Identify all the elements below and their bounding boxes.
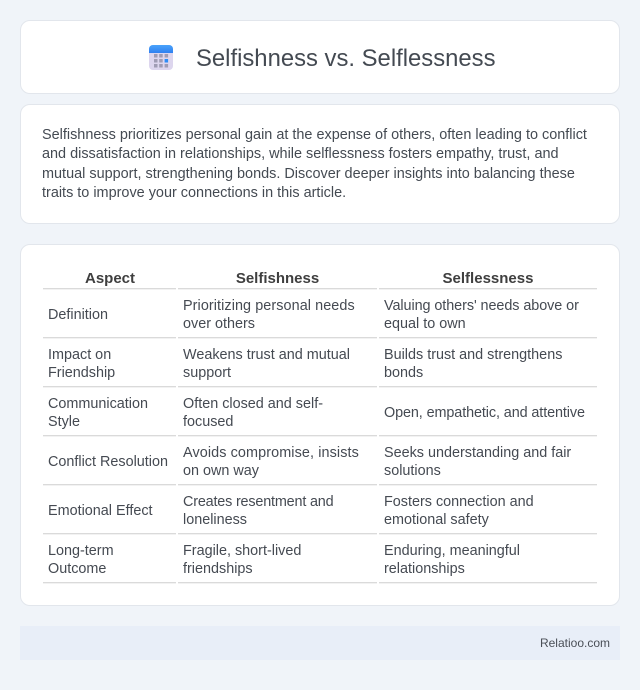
row: Impact on Friendship: Weakens trust and mutual: [183, 347, 350, 363]
table header: [43, 270, 597, 290]
row: Long-term Outcome: Enduring, meaningful: [384, 543, 520, 559]
row: Long-term Outcome: Outcome: [48, 561, 106, 577]
intro text: Selfishness prioritizes personal gain at the expense of others, often leading to conflict: [42, 127, 587, 143]
row: Long-term Outcome: [43, 543, 597, 584]
row: Conflict Resolution: on own way: [183, 463, 259, 479]
panel: intro paragraph: [20, 104, 620, 224]
row: Emotional Effect: emotional safety: [384, 512, 489, 528]
footer text: Relatioo.com: [540, 636, 610, 650]
row: Communication Style: focused: [183, 414, 233, 430]
row: Communication Style: Open, empathetic, and attentive: [384, 405, 585, 421]
row: Impact on Friendship: [43, 347, 597, 388]
row: Emotional Effect: Creates resentment and: [183, 494, 333, 510]
footer bar: [20, 626, 620, 660]
row: Definition: Valuing others' needs above or: [384, 298, 579, 314]
row: Long-term Outcome: Long-term: [48, 543, 114, 559]
row: Impact on Friendship: Builds trust and strengthens: [384, 347, 562, 363]
row: Communication Style: Communication: [48, 396, 148, 412]
intro text: mutual support, strengthening bonds. Discover deeper insights into balancing these: [42, 166, 575, 182]
title card: [20, 20, 620, 94]
intro text: traits to improve your connections in this article.: [42, 185, 346, 201]
table header: Aspect: [85, 270, 135, 287]
row: Conflict Resolution: Avoids compromise, insists: [183, 445, 359, 461]
row: Conflict Resolution: Conflict Resolution: [48, 454, 168, 470]
row: Emotional Effect: [43, 494, 597, 535]
intro text: and dissatisfaction in relationships, while selflessness fosters empathy, trust, and: [42, 146, 559, 162]
title: Selfishness vs. Selflessness: [196, 45, 496, 72]
row: Impact on Friendship: Impact on: [48, 347, 111, 363]
row: Definition: over others: [183, 316, 255, 332]
row: Conflict Resolution: [43, 445, 597, 486]
row: Emotional Effect: Emotional Effect: [48, 503, 153, 519]
panel: comparison table: [20, 244, 620, 606]
row: Definition: Definition: [48, 307, 108, 323]
row: Definition: Prioritizing personal needs: [183, 298, 355, 314]
row: Conflict Resolution: solutions: [384, 463, 441, 479]
row: Communication Style: Often closed and self-: [183, 396, 323, 412]
icon: calendar: [149, 45, 173, 70]
row: Conflict Resolution: Seeks understanding and fair: [384, 445, 571, 461]
row: Definition: [43, 298, 597, 339]
row: Communication Style: Style: [48, 414, 80, 430]
row: Impact on Friendship: bonds: [384, 365, 423, 381]
row: Long-term Outcome: relationships: [384, 561, 465, 577]
row: Definition: equal to own: [384, 316, 466, 332]
table header: Selflessness: [443, 270, 533, 287]
row: Long-term Outcome: friendships: [183, 561, 253, 577]
row: Emotional Effect: loneliness: [183, 512, 247, 528]
row: Long-term Outcome: Fragile, short-lived: [183, 543, 301, 559]
row: Communication Style: [43, 396, 597, 437]
row: Impact on Friendship: support: [183, 365, 231, 381]
row: Impact on Friendship: Friendship: [48, 365, 115, 381]
intro text: [42, 127, 587, 201]
table header: Selfishness: [236, 270, 319, 287]
row: Emotional Effect: Fosters connection and: [384, 494, 534, 510]
